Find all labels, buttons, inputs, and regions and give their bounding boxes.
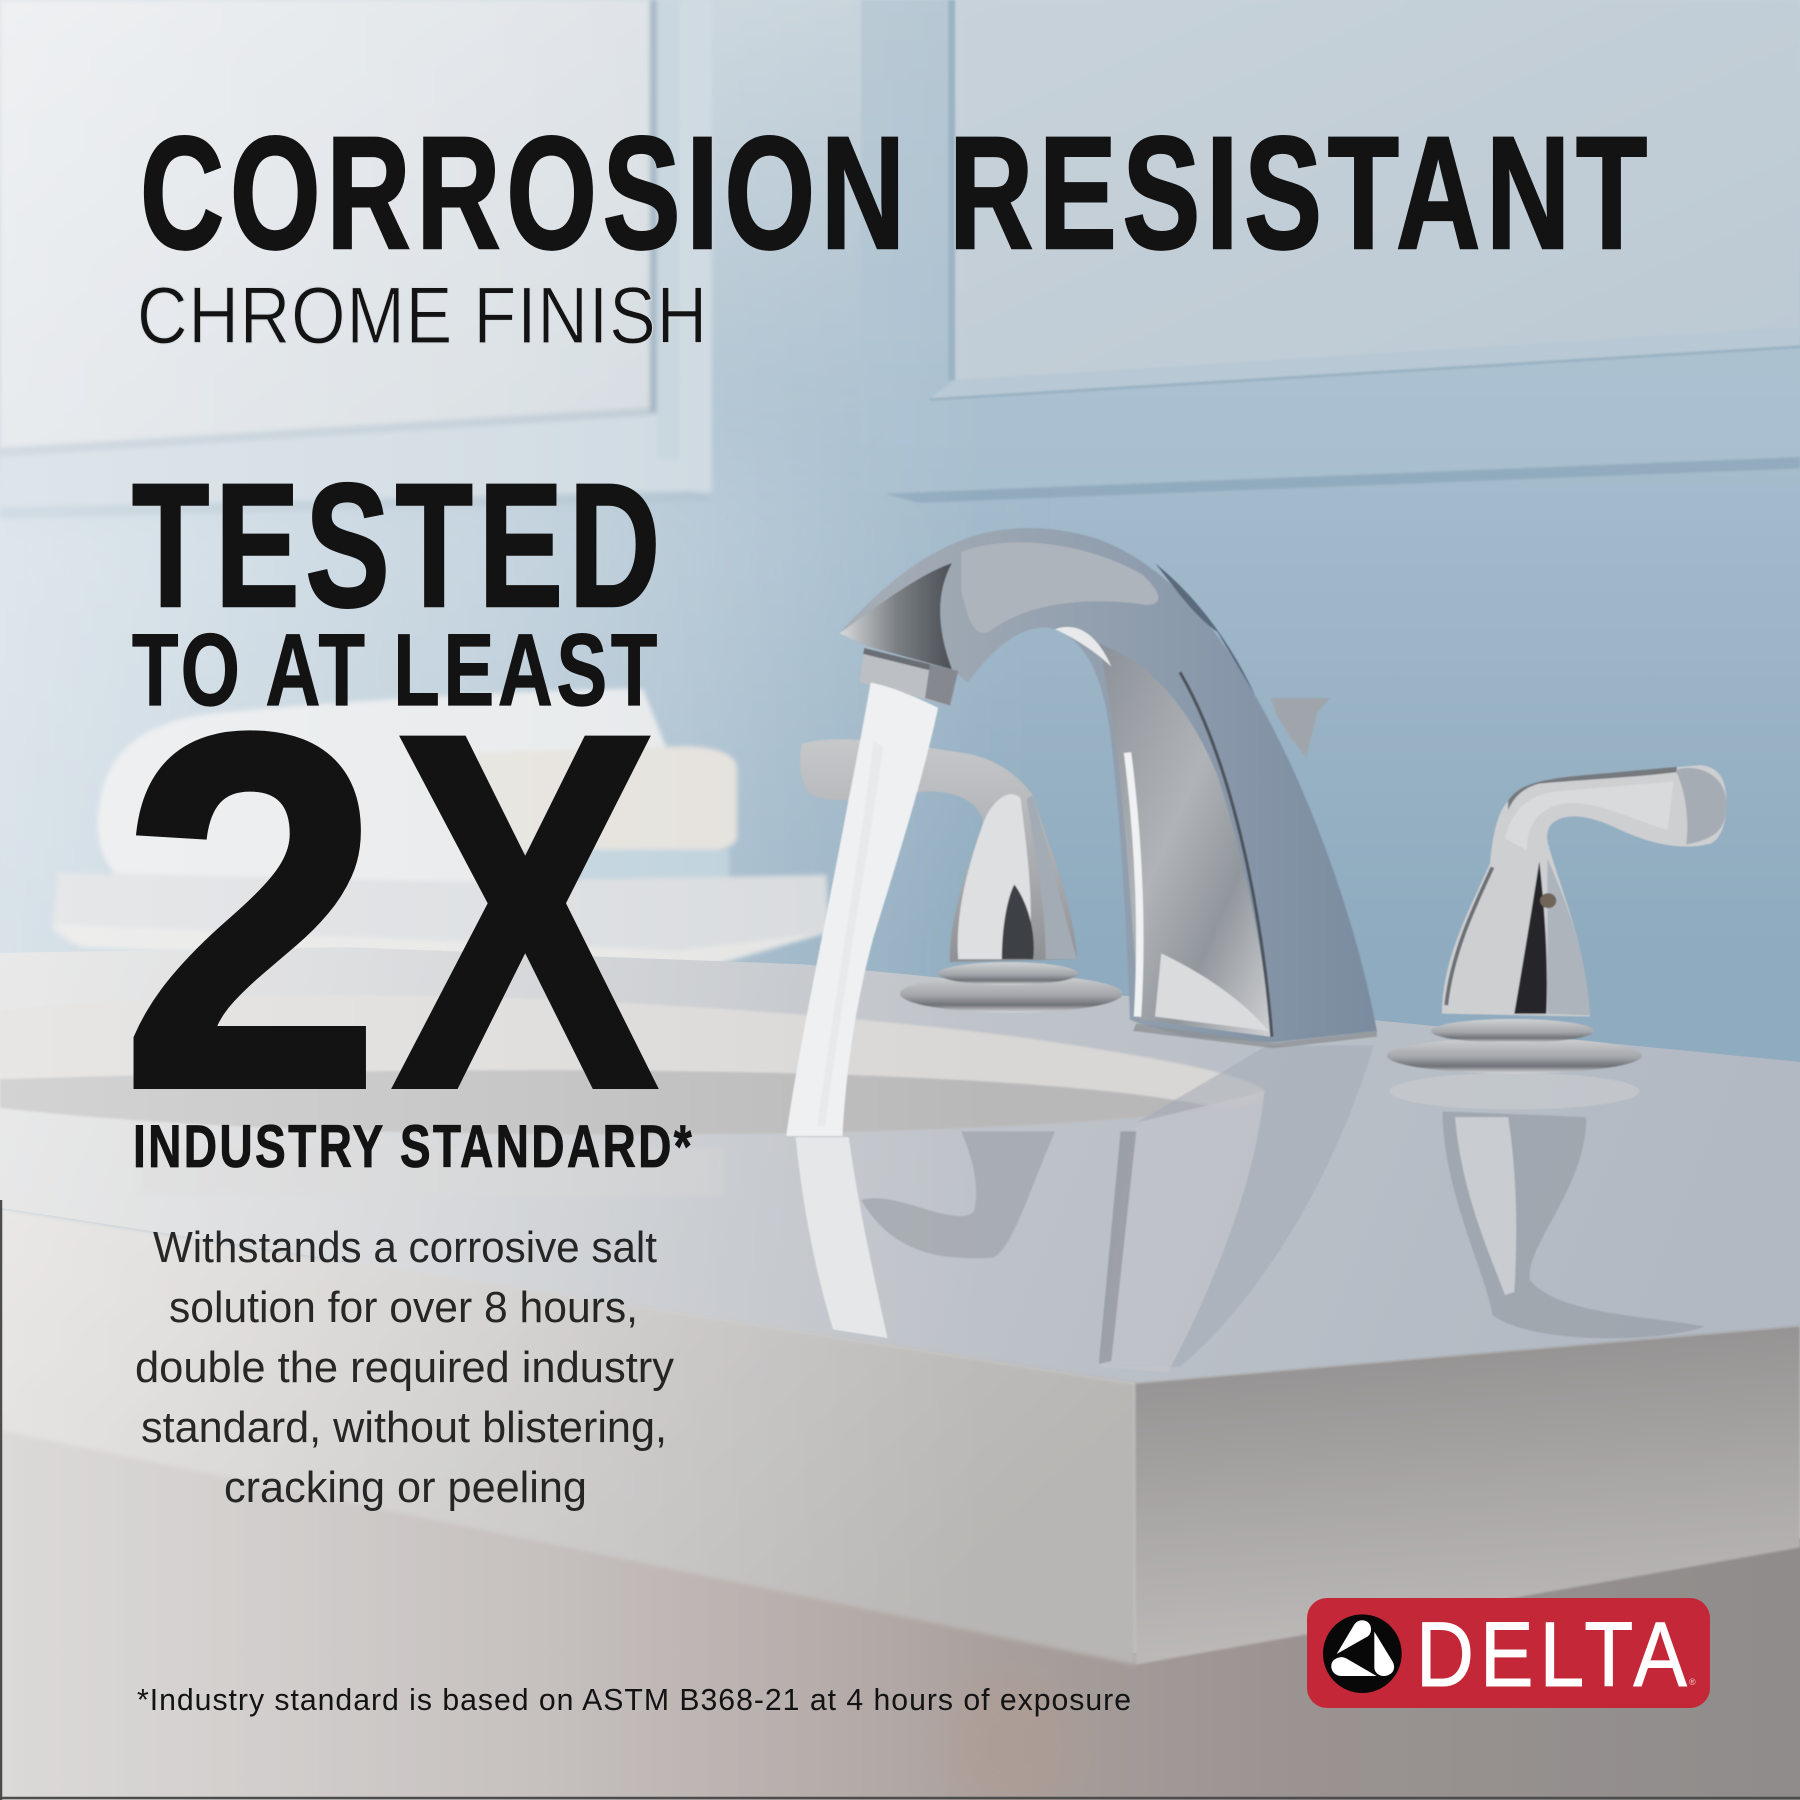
- water stream: [786, 683, 938, 1136]
- towel, soap and tray: [52, 689, 829, 976]
- counter left face: [0, 1208, 1135, 1665]
- aerator ring: [859, 648, 958, 705]
- subtitle: chrome finish: CHROME FINISH: [137, 271, 708, 361]
- big number: 2X: X: [392, 630, 660, 1194]
- right wall panel and moulding: [859, 0, 1800, 503]
- sink basin: [0, 1070, 1217, 1135]
- logo wordmark: DELTA: [1416, 1604, 1693, 1706]
- pop-up stopper: [1271, 698, 1330, 757]
- left handle: [800, 739, 1122, 1013]
- cabinet below the counter: [0, 1412, 1800, 1800]
- heading: to at least: TO AT LEAST: [132, 613, 661, 727]
- footnote: *Industry standard is based on ASTM B368-21 at 4 hours of exposure: [137, 1682, 1132, 1717]
- right handle: [1387, 765, 1726, 1073]
- icon: delta triangle mark: [1323, 1614, 1402, 1693]
- body text: double the required industry: [135, 1343, 674, 1392]
- left wall panel: [0, 0, 712, 519]
- body text: [135, 1223, 674, 1512]
- body text: standard, without blistering,: [141, 1403, 667, 1452]
- registered mark: ®: [1689, 1677, 1696, 1687]
- big number: 2X: 2: [120, 630, 382, 1194]
- faucet: [786, 528, 1726, 1372]
- counter reflections: [861, 1045, 1705, 1372]
- sink rim: [0, 995, 1265, 1108]
- wall haze below the moulding: [0, 459, 1010, 1056]
- body text: cracking or peeling: [224, 1463, 587, 1512]
- counter right face: [1135, 1326, 1800, 1665]
- spout inner polished face: [1099, 644, 1271, 1037]
- spout highlight: [961, 542, 1158, 633]
- heading: tested: TESTED: [132, 448, 666, 644]
- left haze overlay: [0, 0, 987, 1800]
- body text: solution for over 8 hours,: [169, 1283, 638, 1332]
- bottom and left image edge: [0, 1200, 1800, 1800]
- water reflection: [796, 1137, 888, 1338]
- big number: 2X: [120, 630, 660, 1194]
- body text: Withstands a corrosive salt: [153, 1223, 657, 1272]
- blue wall: [0, 0, 1800, 1263]
- warm glow on cabinet: [941, 1676, 1079, 1800]
- nozzle cone: [839, 563, 952, 669]
- spout body: [839, 528, 1377, 1042]
- heading: industry standard: INDUSTRY STANDARD*: [133, 1113, 694, 1180]
- logo: Delta: [1307, 1598, 1710, 1708]
- spout dark reflection: [1155, 563, 1255, 695]
- countertop surface: [0, 947, 1800, 1383]
- soap tray reflection: [138, 1148, 723, 1196]
